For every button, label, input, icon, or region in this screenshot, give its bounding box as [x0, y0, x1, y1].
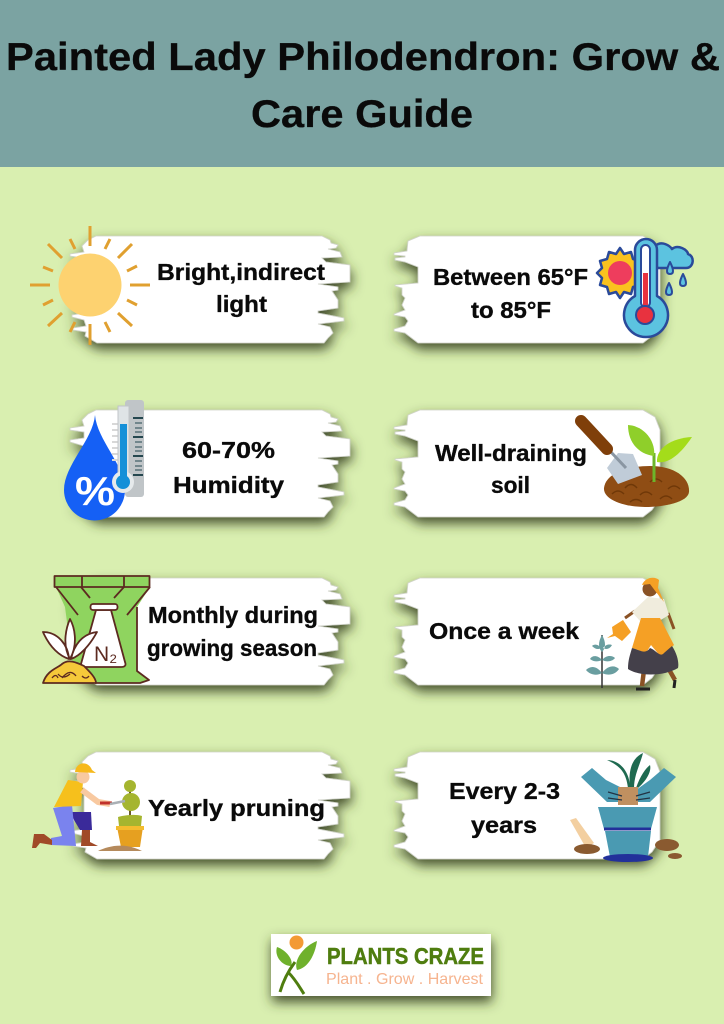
title text — [6, 36, 720, 136]
panel: temperature — [394, 236, 693, 343]
chemical label N2: N₂ — [94, 643, 117, 666]
label text: Yearly pruning — [148, 795, 325, 821]
panel: humidity — [64, 400, 350, 520]
label text: Monthly during — [148, 602, 318, 628]
panel: pruning — [32, 752, 350, 859]
label text: 60-70% — [182, 437, 275, 463]
panel: fertilizer — [43, 576, 350, 685]
label text — [433, 264, 588, 323]
label text — [157, 259, 325, 317]
label text: light — [216, 291, 267, 317]
icon: sun — [30, 226, 150, 345]
icon: trowel and seedling — [581, 421, 692, 507]
icon: repotting plant — [570, 753, 682, 862]
label text: Humidity — [173, 472, 284, 498]
card background — [394, 578, 660, 685]
label text: Once a week — [429, 618, 579, 644]
label text — [449, 778, 560, 838]
panel: soil — [394, 410, 692, 517]
icon: water drop — [64, 415, 125, 520]
label text: Well-draining — [435, 440, 587, 466]
label text: soil — [491, 472, 530, 498]
icon: thermometer with sun and rain — [597, 239, 693, 337]
card background — [70, 410, 350, 517]
icon: water drop and thermometer: % — [75, 468, 115, 514]
title banner — [0, 0, 724, 167]
label text — [173, 437, 284, 498]
card background — [70, 236, 350, 343]
icon: gardener pruning topiary — [32, 763, 144, 851]
label text: Bright,indirect — [157, 259, 325, 285]
panel: light — [30, 226, 350, 345]
title text: Care Guide — [251, 93, 473, 136]
card background — [394, 236, 660, 343]
label text: years — [471, 812, 537, 838]
label text: growing season — [147, 635, 317, 661]
title text: Painted Lady Philodendron: Grow & — [6, 36, 720, 79]
label text — [435, 440, 587, 498]
icon: fertilizer bag — [43, 576, 150, 683]
logo name: PLANTS CRAZE — [327, 943, 484, 969]
icon: water drop and thermometer — [64, 400, 144, 520]
logo mark — [276, 936, 317, 994]
card background — [70, 578, 350, 685]
card background — [70, 752, 350, 859]
label text: Between 65°F — [433, 264, 588, 290]
card background — [394, 752, 660, 859]
label text: to 85°F — [471, 297, 551, 323]
label text: Every 2-3 — [449, 778, 560, 804]
card background — [394, 410, 660, 517]
logo: Plants Craze — [271, 934, 491, 996]
icon: woman watering plant — [586, 578, 678, 689]
panel: watering — [394, 578, 678, 689]
panel: repotting — [394, 752, 682, 862]
logo tagline: Plant . Grow . Harvest — [326, 971, 484, 988]
label text — [147, 602, 318, 661]
